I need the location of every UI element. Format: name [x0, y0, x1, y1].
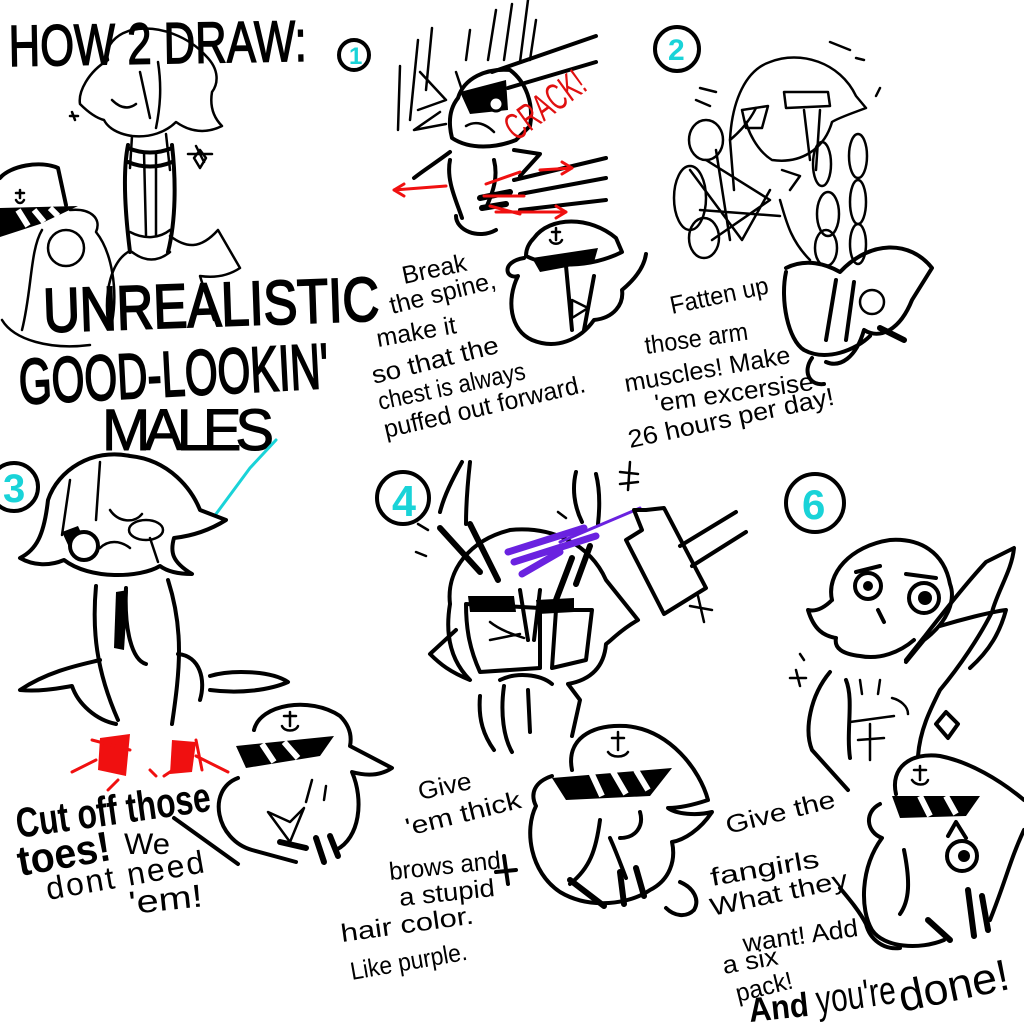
text: step 6 instructions: Give the	[723, 786, 838, 840]
text: step 4 instructions: Like purple.	[348, 938, 469, 986]
text: step 3 instructions: We	[124, 828, 170, 861]
text: step 1 instructions	[369, 249, 588, 444]
step 1 number badge: 1	[349, 43, 362, 70]
text: step 6 instructions: a six	[720, 943, 781, 980]
step 6 number badge: 6	[802, 481, 825, 528]
hat character, step 3	[219, 705, 392, 862]
text: step 1 instructions: make it	[374, 311, 458, 353]
illustration: step 3 cutting off toes	[20, 454, 288, 724]
text: step 6 instructions: fangirls	[708, 845, 821, 892]
hat character, step 2	[784, 247, 932, 384]
pointer line, step 3	[174, 818, 238, 864]
illustration: step 1 breaking the spine	[398, 0, 606, 234]
step 3 number badge: 3	[3, 467, 25, 511]
step 6 number badge	[786, 474, 844, 532]
closing text: And you're done	[747, 951, 1014, 1024]
illustration: tall handsome male	[70, 29, 240, 322]
heading: Unrealistic Good-Lookin' Males	[17, 265, 380, 463]
text: step 1 instructions: so that the	[369, 331, 502, 390]
text: step 2 instructions: 'em excersise	[653, 368, 815, 418]
hat character, step 1	[508, 222, 646, 344]
text: step 6 instructions	[707, 786, 860, 1008]
text: step 3 instructions: dont need	[43, 844, 207, 907]
bleeding toes	[72, 734, 228, 790]
cyan flourish line	[216, 440, 276, 514]
text: step 4 instructions: Give	[415, 767, 474, 806]
text: step 1 instructions: the spine,	[387, 266, 499, 320]
text: step 3 instructions: Cut off those	[13, 773, 213, 847]
text: step 4 instructions	[339, 767, 525, 986]
closing text: And you're done: you're	[813, 968, 898, 1023]
arrows and crack label, step 1	[394, 62, 594, 218]
step 1 number badge	[339, 40, 369, 70]
illustration: step 4 brows and purple hair	[416, 462, 638, 752]
step 4 number badge	[377, 472, 429, 526]
heading: Unrealistic Good-Lookin' Males: MALES	[102, 398, 274, 463]
illustration: step 6 six pack pose	[790, 540, 1014, 790]
step 2 number badge	[655, 27, 699, 71]
text: step 2 instructions: Fatten up	[667, 272, 771, 320]
illustration: hair dye bottle and hand	[620, 462, 746, 622]
step 3 number badge	[0, 463, 38, 511]
step 4 number badge: 4	[392, 477, 417, 526]
text: step 6 instructions: want! Add	[740, 914, 860, 958]
text: step 4 instructions: 'em thick	[403, 786, 525, 842]
text: step 6 instructions: What they	[707, 865, 851, 922]
heading: Unrealistic Good-Lookin' Males: GOOD-LOOKIN'	[17, 330, 330, 418]
text: step 3 instructions	[13, 773, 213, 921]
arrows and crack label, step 1: CRACK!	[497, 62, 594, 149]
illustration: hat character, title panel	[0, 164, 114, 346]
purple hair scribble	[508, 508, 640, 574]
text: step 3 instructions: 'em!	[127, 877, 204, 921]
text: step 2 instructions: those arm	[643, 318, 750, 360]
text: step 2 instructions	[622, 272, 837, 454]
text: step 2 instructions: muscles! Make	[622, 341, 792, 398]
text: step 2 instructions: 26 hours per day!	[625, 383, 837, 454]
illustration: step 2 fat arm muscles	[674, 42, 880, 266]
step 2 number badge: 2	[668, 34, 685, 67]
text: step 1 instructions: Break	[399, 249, 470, 290]
text: step 4 instructions: brows and	[388, 846, 502, 886]
heading: Unrealistic Good-Lookin' Males: UNREALISTIC	[42, 265, 380, 346]
text: step 4 instructions: a stupid	[398, 874, 496, 912]
text: step 1 instructions: chest is always	[375, 357, 528, 416]
text: step 3 instructions: toes!	[13, 822, 114, 885]
text: step 1 instructions: puffed out forward.	[381, 370, 588, 444]
hat character, step 4	[496, 726, 712, 915]
title: How 2 Draw: HOW 2 DRAW:	[8, 9, 307, 79]
text: step 4 instructions: hair color.	[339, 902, 476, 948]
hat character, step 6	[840, 755, 1024, 948]
text: step 6 instructions: pack!	[733, 967, 796, 1008]
closing text: And you're done: done!	[894, 951, 1014, 1022]
